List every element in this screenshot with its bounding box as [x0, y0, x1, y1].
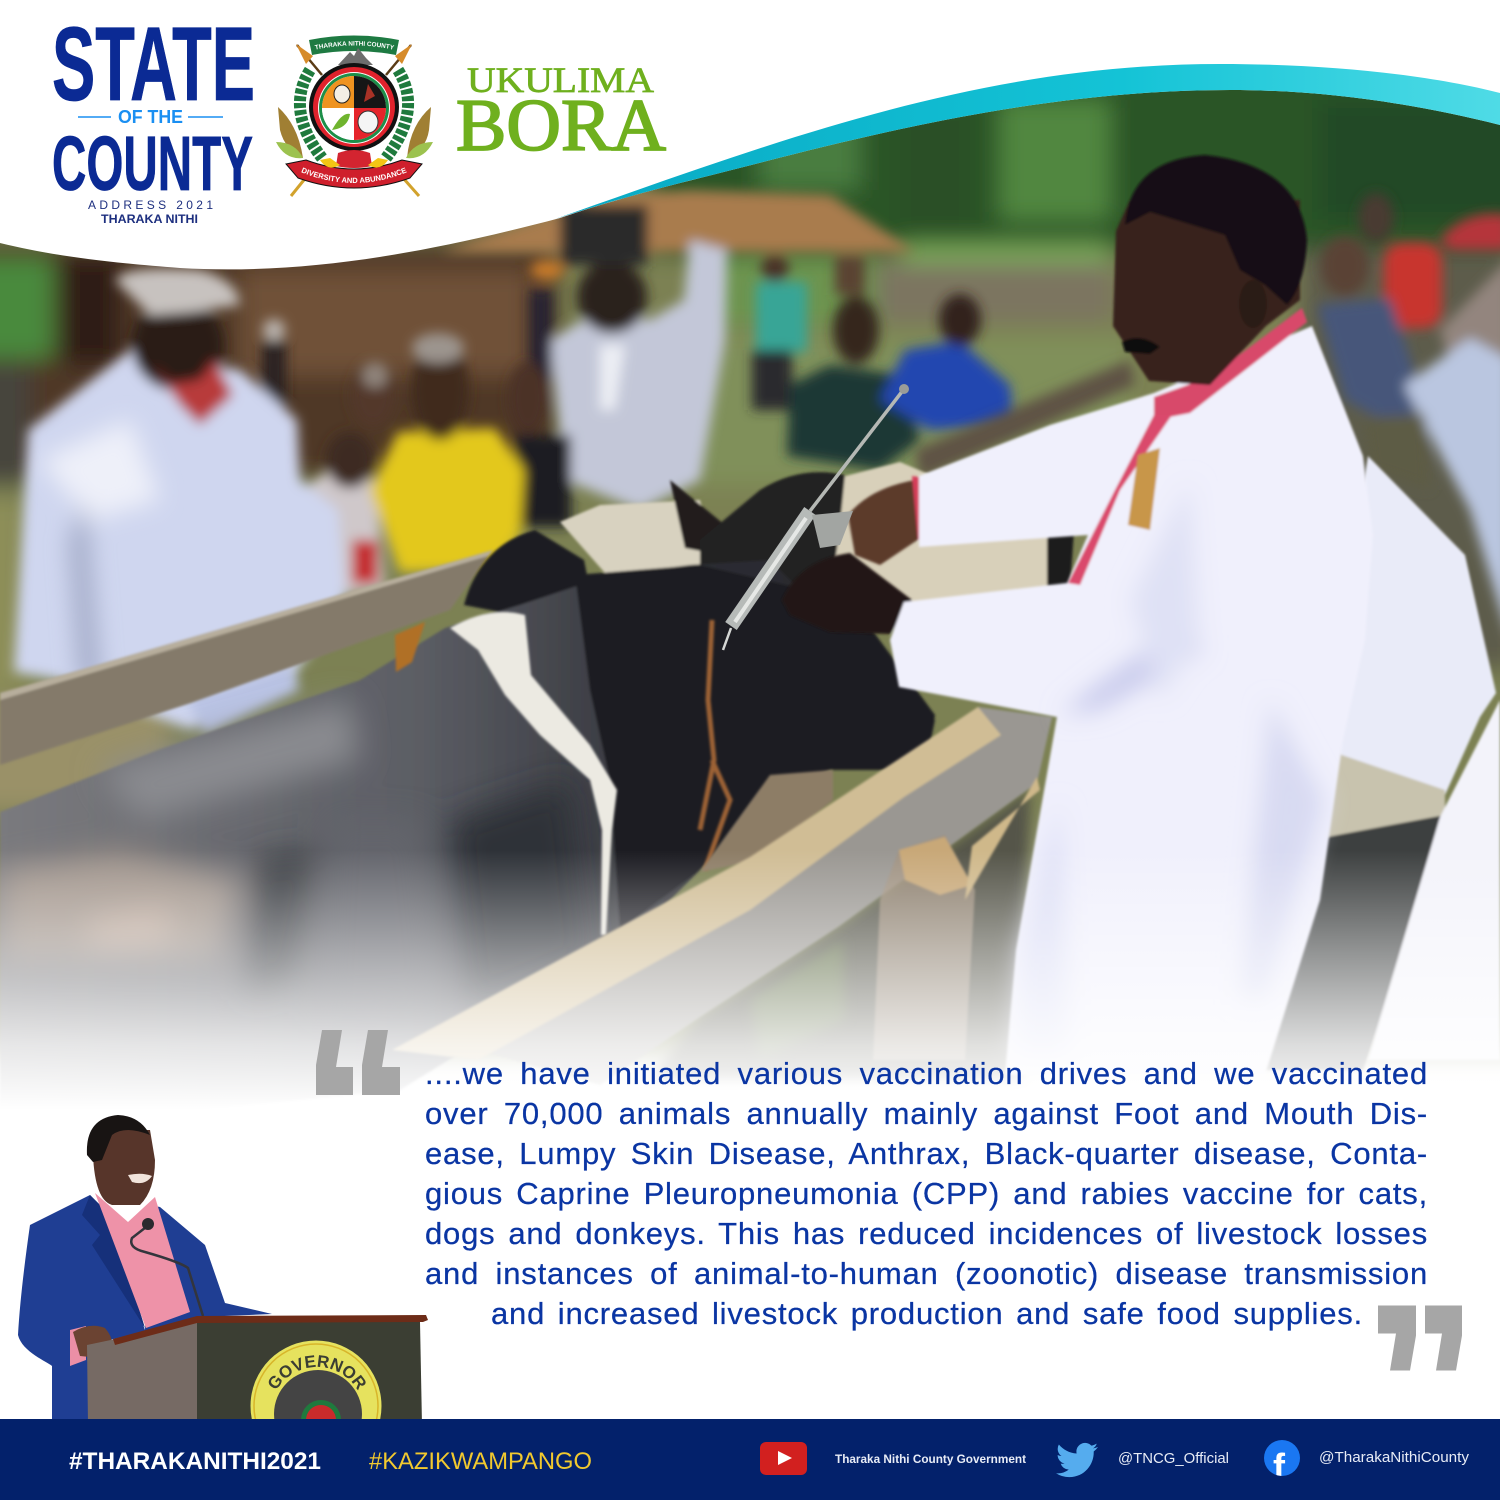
quote text block: dogs and donkeys. This has reduced incidences of livestock losses — [425, 1216, 1428, 1251]
hashtag: Tharaka Nithi 2021: #THARAKANITHI2021 — [69, 1448, 321, 1475]
governor seal: GOVERNOR — [268, 1355, 366, 1390]
quote text block — [425, 1056, 1428, 1331]
white stripe on cow — [450, 612, 617, 935]
speaker photo at the podium — [18, 1115, 428, 1419]
cuff — [912, 476, 932, 540]
STATE: STATE — [52, 6, 255, 123]
icon: YouTube — [760, 1442, 807, 1475]
BORA: BORA — [456, 85, 666, 167]
ground beneath lower rail — [650, 790, 1030, 1080]
crowd — [756, 282, 807, 352]
other children — [515, 435, 571, 527]
blue coat seen beneath rail — [187, 665, 300, 735]
podium front — [197, 1322, 422, 1425]
ADDRESS 2021: ADDRESS 2021 — [88, 198, 213, 212]
quote text block: and instances of animal-to-human (zoonotic) disease transmission — [425, 1256, 1428, 1291]
header white wave — [0, 0, 1500, 269]
quote text block: ease, Lumpy Skin Disease, Anthrax, Black-quarter disease, Conta- — [425, 1136, 1428, 1171]
icon: Facebook — [1264, 1440, 1300, 1476]
wheat — [278, 107, 303, 158]
left man coat highlights — [40, 420, 160, 690]
quote text block: over 70,000 animals annually mainly against Foot and Mouth Dis- — [425, 1096, 1428, 1131]
red collar and tie — [1154, 308, 1307, 420]
cow group — [0, 462, 1075, 1130]
photo background: trees, field, hut and crowd — [0, 60, 1500, 1060]
coat soft shading — [1015, 480, 1325, 1060]
blurred man with camera — [550, 240, 727, 510]
badge — [1128, 448, 1160, 530]
far rail — [915, 360, 1135, 480]
icon: Twitter — [1056, 1443, 1098, 1477]
white fade over the bottom of the photo — [0, 850, 1500, 1110]
OF THE: OF THE — [118, 107, 183, 127]
jacket — [18, 1195, 272, 1425]
shield — [309, 63, 399, 151]
spears — [291, 45, 419, 196]
upper wooden rail — [0, 550, 493, 765]
quote text block: gious Caprine Pleuropneumonia (CPP) and rabies vaccine for cats, — [425, 1176, 1428, 1211]
mountains — [338, 48, 373, 65]
vaccinating man — [782, 155, 1373, 1075]
second man in white coat behind — [1255, 456, 1500, 1070]
head — [1113, 200, 1300, 385]
logo: Ukulima Bora — [456, 60, 666, 167]
photo: governor vaccinating cattle — [0, 90, 1500, 1092]
logo: State of the County — [52, 6, 255, 226]
icon: closing quote mark — [1378, 1306, 1462, 1370]
top banner — [309, 36, 399, 55]
red ribbon with motto — [286, 160, 422, 188]
white lab coat — [890, 326, 1373, 1075]
cyan accent swoosh — [555, 64, 1500, 219]
COUNTY: COUNTY — [52, 121, 253, 207]
head — [93, 1130, 155, 1205]
icon: county coat of arms — [276, 36, 433, 197]
Twitter label: @TNCG_Official — [1118, 1451, 1229, 1467]
pink shirt — [95, 1193, 190, 1328]
syringe — [723, 384, 909, 650]
hashtag: Kazi kwa mpango: #KAZIKWAMPANGO — [369, 1448, 592, 1475]
microphone — [131, 1224, 203, 1316]
hands — [782, 553, 912, 634]
Facebook label: @TharakaNithiCounty — [1319, 1450, 1470, 1466]
quote text block: and increased livestock production and safe food supplies. — [491, 1296, 1363, 1331]
YouTube label: Tharaka Nithi County Government — [835, 1454, 1026, 1466]
quote text block: ....we have initiated various vaccination drives and we vaccinated — [425, 1056, 1428, 1091]
UKULIMA: UKULIMA — [467, 60, 654, 100]
podium rim — [113, 1315, 428, 1345]
wreath — [300, 70, 322, 158]
icon: Facebook: f — [1273, 1446, 1286, 1487]
icon: county coat of arms: THARAKA NITHI COUNTY — [314, 41, 394, 50]
icon: county coat of arms: DIVERSITY AND ABUNDANCE — [301, 168, 407, 183]
hand and cuff — [70, 1326, 86, 1366]
bag behind rail — [700, 770, 833, 872]
yellow shirt child — [370, 428, 524, 572]
cow fur shading — [0, 700, 590, 1010]
lower wooden rail and post — [392, 707, 1052, 1085]
left man in white coat — [14, 350, 345, 730]
ear tag and rope — [395, 620, 730, 870]
THARAKA NITHI: THARAKA NITHI — [101, 212, 198, 226]
icon: opening quote mark — [316, 1030, 400, 1095]
governor seal — [250, 1340, 382, 1419]
footer bar — [0, 1419, 1500, 1500]
podium side — [87, 1322, 197, 1425]
dark neck — [575, 565, 935, 930]
